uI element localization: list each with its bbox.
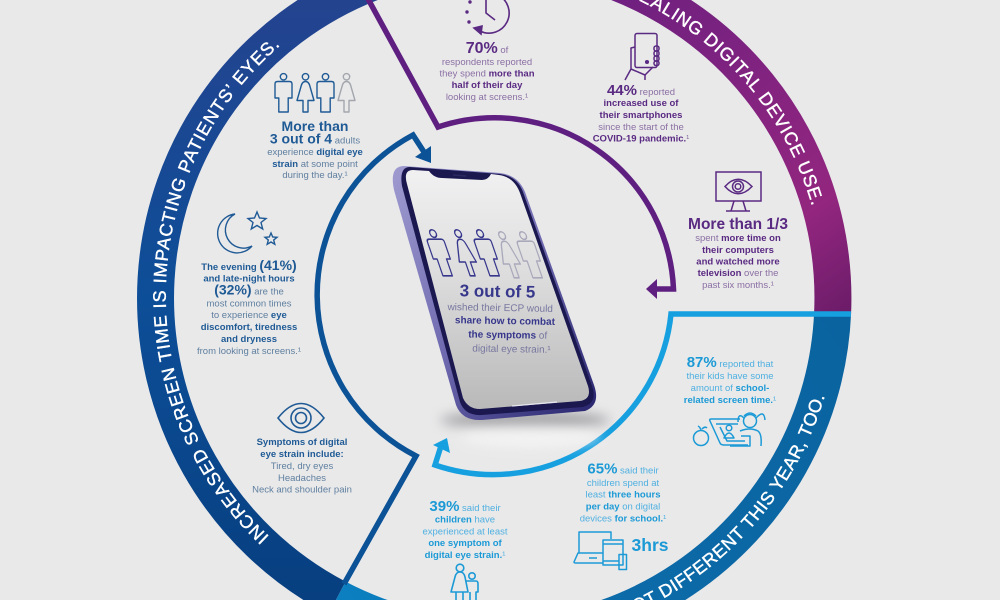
block: symptoms of digital eye strain: Headaches: [278, 473, 326, 484]
block: evening and late-night hours: The evening (41%): [201, 257, 297, 273]
block: 65 percent three hours: children spend at: [587, 478, 660, 489]
block: 70 percent: 70% of: [466, 40, 509, 57]
block: 70 percent: half of their day: [452, 80, 523, 91]
icon: monitor with eye: [716, 172, 761, 211]
block: evening and late-night hours: [197, 212, 301, 357]
phone text: wished their ECP would: [446, 302, 553, 315]
phone screen: [406, 170, 589, 409]
block: 39 percent symptoms in children: children have: [435, 514, 495, 526]
block: 44 percent smartphones: 44% reported: [607, 82, 675, 99]
block: 87 percent school screen time: 87% reported that: [687, 354, 774, 371]
block: evening and late-night hours: and late-night hours: [203, 274, 295, 284]
ring: children segment: [336, 314, 852, 600]
phone people icons: [423, 230, 546, 278]
block: evening and late-night hours: from looking at screens.¹: [197, 346, 301, 357]
arrow: purple arc into phone: [367, 0, 674, 299]
arrow: light blue arc into phone: [433, 314, 851, 475]
phone text: share how to combat: [455, 315, 556, 328]
block: more than one third: [688, 172, 788, 291]
block: 39 percent symptoms in children: [422, 498, 508, 600]
arrow: dark blue arc into phone: [317, 135, 431, 584]
block: 3 out of 4 adults: More than: [282, 118, 348, 134]
block: 87 percent school screen time: related screen time.¹: [684, 395, 776, 406]
icon: hand holding phone: [625, 34, 659, 80]
block: 70 percent: [439, 0, 535, 103]
icon: eye: [278, 404, 324, 432]
block: 3 out of 4 adults: during the day.¹: [282, 170, 348, 181]
block: more than one third: television over the: [698, 268, 778, 279]
phone text: 3 out of 5: [460, 281, 535, 302]
block: 3 out of 4 adults: [267, 74, 363, 181]
block: 3 out of 4 adults: strain at some point: [272, 159, 358, 170]
block: 70 percent: respondents reported: [442, 57, 532, 68]
icon: moon and stars: [218, 212, 277, 253]
phone home bar: [512, 402, 557, 406]
icon: apple, laptop and child: [694, 413, 765, 446]
block: 65 percent three hours: devices for school.¹: [580, 514, 666, 524]
block: more than one third: More than 1/3: [688, 216, 788, 233]
block: more than one third: spent more time on: [695, 233, 781, 244]
block: 39 percent symptoms in children: experienced at least: [422, 526, 508, 538]
block: evening and late-night hours: (32%) are the: [214, 282, 284, 298]
3hrs label: 3hrs: [632, 535, 669, 555]
block: 39 percent symptoms in children: one symptom of: [428, 538, 503, 549]
phone text: [446, 281, 556, 356]
block: 44 percent smartphones: since the start of the: [598, 122, 684, 133]
phone text: digital eye strain.¹: [472, 344, 551, 356]
ring: digital device use segment: [611, 0, 852, 314]
phone reflection: [460, 427, 600, 447]
block: symptoms of digital eye strain: eye strain include:: [260, 449, 344, 460]
block: more than one third: and watched more: [696, 256, 780, 268]
block: symptoms of digital eye strain: Symptoms of digital: [257, 437, 347, 448]
icon: four people: [275, 74, 355, 112]
block: 44 percent smartphones: increased use of: [604, 98, 679, 109]
block: 3 out of 4 adults: 3 out of 4 adults: [270, 130, 360, 146]
block: 39 percent symptoms in children: 39% said their: [429, 498, 501, 515]
block: 87 percent school screen time: [684, 354, 776, 446]
block: 65 percent three hours: per day on digital: [586, 502, 660, 512]
icon: parent and child: [451, 564, 478, 600]
block: evening and late-night hours: to experience eye: [211, 310, 287, 321]
ring label: blue segment: INCREASED SCREEN TIME IS IMPACTING PATIENTS’ EYES.: [152, 42, 280, 545]
block: more than one third: their computers: [702, 245, 774, 256]
phone text: the symptoms of: [468, 329, 547, 342]
phone speaker: [453, 175, 466, 176]
block: 87 percent school screen time: their kids have some: [686, 371, 774, 382]
block: 65 percent three hours: 65% said their: [587, 460, 659, 478]
block: 44 percent smartphones: COVID-19 pandemic.¹: [593, 134, 689, 144]
ring: increased screen time segment: [137, 0, 378, 600]
block: symptoms of digital eye strain: Neck and shoulder pain: [252, 484, 352, 496]
block: 65 percent three hours: least three hours: [586, 490, 660, 500]
phone body: [393, 166, 596, 420]
phone bezel: [401, 167, 594, 415]
block: symptoms of digital eye strain: Tired, dry eyes: [271, 461, 333, 472]
block: 70 percent: they spend more than: [439, 68, 535, 80]
icon: clock: [466, 0, 509, 34]
block: evening and late-night hours: and dryness: [221, 334, 277, 345]
block: evening and late-night hours: discomfort, tiredness: [201, 322, 297, 333]
block: 44 percent smartphones: their smartphones: [600, 110, 682, 121]
block: more than one third: past six months.¹: [702, 280, 774, 291]
icon: laptop, tablet and phone: [574, 532, 626, 570]
block: 70 percent: looking at screens.¹: [446, 92, 528, 103]
block: 87 percent school screen time: amount of school-: [691, 383, 769, 394]
block: 65 percent three hours: [574, 460, 669, 570]
block: 39 percent symptoms in children: digital eye strain.¹: [425, 550, 505, 561]
phone: [393, 166, 610, 447]
block: evening and late-night hours: most common times: [206, 298, 292, 310]
phone shadow: [440, 411, 610, 429]
block: 44 percent smartphones: [593, 34, 689, 144]
block: symptoms of digital eye strain: [252, 404, 352, 496]
block: 3 out of 4 adults: experience digital eye: [267, 147, 363, 158]
